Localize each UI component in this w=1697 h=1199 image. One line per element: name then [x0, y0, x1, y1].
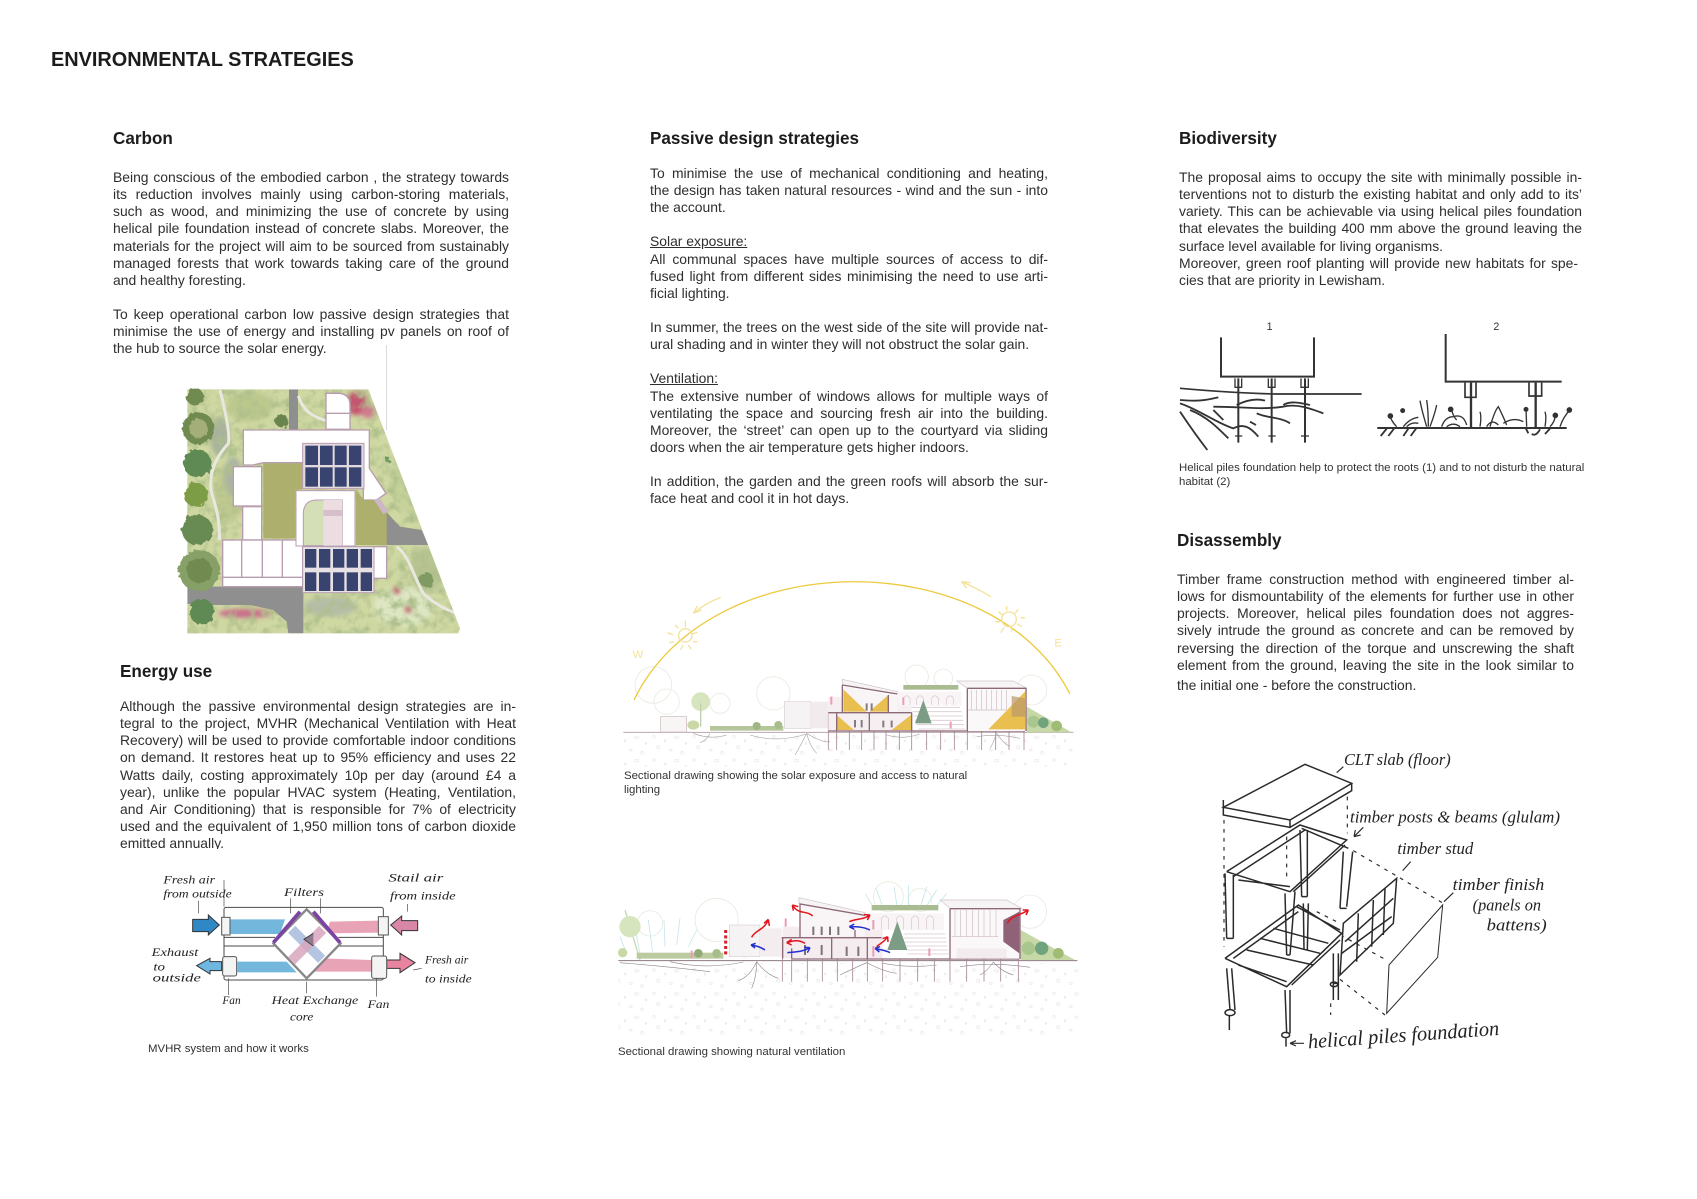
text block: disassembly body: projects. Moreover, helical piles foundation does not aggres- [1177, 605, 1574, 621]
text block: carbon body: such as wood, and minimizing the use of concrete by using [113, 203, 509, 219]
sectional drawing: solar exposure [623, 581, 1074, 766]
text block: energy use body: used and the equivalent of 1,950 million tons of carbon dioxide [120, 818, 516, 834]
hand labels: timber stud [1397, 839, 1474, 858]
text block: disassembly body: the initial one - before the construction. [1177, 677, 1416, 693]
pink ducts [313, 921, 378, 972]
compass letters: W [633, 649, 644, 661]
text block: biodiversity body: Moreover, green roof planting will provide new habitats for spe- [1179, 255, 1578, 271]
panel: biodiversity [1179, 129, 1582, 288]
sun east [962, 582, 1025, 633]
text block: energy use body [120, 698, 516, 849]
figures [831, 697, 951, 728]
text block: passive design body [650, 165, 1048, 506]
building roof [223, 393, 387, 587]
right volume [940, 900, 1022, 908]
posts and beams [1225, 825, 1353, 955]
CLT slab [1223, 764, 1352, 827]
leader lines [198, 880, 422, 997]
text block: disassembly body: element from the ground, leaving the site in the look similar to [1177, 657, 1574, 673]
red fence [721, 930, 730, 957]
text block: energy use body: Watts daily, costing approximately 10p per day (around £4 a [120, 766, 516, 782]
casing [224, 907, 383, 980]
caption: solar section: lighting [624, 784, 660, 796]
text block: biodiversity body [1179, 169, 1582, 288]
helical piles sketches [1179, 321, 1572, 450]
solar panels lower [303, 547, 374, 593]
arches and green roof [867, 913, 944, 930]
text block: carbon body: managed forests that work towards taking care of the ground [113, 255, 509, 271]
furniture [805, 927, 858, 956]
hand labels: Stail air [388, 871, 444, 885]
text block: passive design body: All communal spaces have multiple sources of access to dif- [650, 251, 1048, 267]
piles [782, 938, 1018, 982]
text block: carbon body: the hub to source the solar energy. [113, 340, 327, 356]
text block: biodiversity body: terventions not to disturb the existing habitat and only add to its’ [1179, 186, 1582, 202]
heading: carbon: Carbon [113, 129, 173, 148]
text block: carbon body: materials for the project will aim to be sourced from sustainably [113, 238, 509, 254]
courtyard [296, 491, 355, 546]
text block: passive design body: Ventilation: [650, 370, 718, 386]
text block: disassembly body: lows for dismountability of the elements for further use in other [1177, 588, 1574, 604]
text block: carbon body [113, 169, 509, 356]
site plan with solar panels [177, 345, 460, 634]
hand labels: from outside [163, 886, 232, 900]
panel: disassembly [1177, 531, 1574, 693]
stairs [903, 934, 949, 954]
text block: carbon body: its reduction involves mainly using carbon-storing materials, [113, 186, 509, 202]
text block: carbon body: Being conscious of the embodied carbon , the strategy towards [113, 169, 509, 185]
heat exchange core [273, 909, 341, 978]
dashed guide lines [1224, 797, 1443, 1015]
title: ENVIRONMENTAL STRATEGIES [51, 49, 354, 71]
arches and green roof [898, 692, 962, 706]
ground and planting [623, 692, 1073, 732]
figures [692, 918, 929, 958]
text block: disassembly body: reversing the direction of the torque and unscrewing the shaft [1177, 640, 1574, 656]
warm air arrows [752, 905, 1028, 947]
text block: energy use body: Although the passive environmental design strategies are in- [120, 698, 516, 714]
ground and planting [618, 910, 1077, 961]
hand labels: Exhaust [150, 945, 199, 959]
text block: carbon body: minimise the use of energy and installing pv panels on roof of [113, 323, 509, 339]
building [692, 898, 1022, 959]
stairs [912, 707, 965, 729]
heading: energy use: Energy use [120, 662, 212, 681]
caption: helical piles: habitat (2) [1179, 476, 1230, 488]
stud wall [1340, 878, 1397, 975]
wind lines [620, 885, 947, 958]
hand labels: Fan [367, 997, 389, 1011]
hand labels [150, 871, 472, 1024]
heading: biodiversity: Biodiversity [1179, 129, 1277, 148]
exploded timber frame sketch [1221, 750, 1560, 1053]
hand labels: timber posts & beams (glulam) [1350, 808, 1560, 827]
grey access roads [187, 389, 428, 633]
cool air arrows [751, 924, 890, 953]
text block: passive design body: fused light from different sides minimising the need to use arti- [650, 268, 1048, 284]
heading: disassembly: Disassembly [1177, 531, 1282, 550]
caption: MVHR: MVHR system and how it works [148, 1043, 309, 1055]
text block: passive design body: the design has taken natural resources - wind and the sun - into [650, 182, 1048, 198]
panel: energy use [120, 662, 516, 849]
text block: passive design body: ural shading and in winter they will not obstruct the solar gain. [650, 336, 1029, 352]
text block: disassembly body: sively intrude the ground as concrete and can be removed by [1177, 622, 1574, 638]
text block: carbon body: To keep operational carbon low passive design strategies that [113, 306, 509, 322]
text block: passive design body: face heat and cool it in hot days. [650, 490, 849, 506]
watercolour texture [187, 389, 461, 634]
panel: carbon [113, 129, 509, 356]
right volume [957, 681, 1027, 688]
hand labels: Fan [221, 993, 241, 1007]
sectional drawing: solar exposure: E [1054, 638, 1062, 650]
text block: biodiversity body: surface level available for living organisms. [1179, 238, 1443, 254]
text block: energy use body: tegral to the project, MVHR (Mechanical Ventilation with Heat [120, 715, 516, 731]
floor frame [1225, 903, 1342, 1047]
hand labels: CLT slab (floor) [1344, 750, 1451, 769]
background trees [635, 665, 1047, 714]
people [855, 703, 892, 727]
building [828, 679, 1027, 731]
text block: disassembly body: Timber frame construction method with engineered timber al- [1177, 571, 1574, 587]
sketch 2: habitat [1377, 321, 1571, 436]
hand labels: timber finish [1453, 875, 1544, 894]
caption: helical piles [1179, 462, 1584, 488]
text block: energy use body: year), unlike the popular HVAC system (Heating, Ventilation, [120, 784, 516, 800]
text block: energy use body: on demand. It restores heat up to 95% efficiency and uses 22 [120, 749, 516, 765]
sketch 2: habitat: 2 [1493, 321, 1499, 333]
hand labels: battens) [1487, 916, 1547, 935]
arrows: air flows [193, 915, 418, 974]
solar panels upper [303, 443, 364, 489]
sketch 1: roots [1180, 321, 1362, 450]
caption: ventilation section: Sectional drawing showing natural ventilation [618, 1046, 845, 1058]
text block: passive design body: ficial lighting. [650, 285, 730, 301]
hand labels: Fresh air [162, 872, 215, 886]
text block: passive design body: ventilating the space and sourcing fresh air into the building. [650, 405, 1048, 421]
text block: passive design body: To minimise the use of mechanical conditioning and heating, [650, 165, 1048, 181]
leader arrows [1290, 767, 1453, 1046]
roots [693, 733, 1020, 755]
hand labels [1307, 750, 1560, 1053]
soil texture [618, 963, 1078, 1038]
MVHR diagram [150, 871, 472, 1024]
heading: passive design: Passive design strategies [650, 129, 859, 148]
text block: energy use body: and Air Conditioning) that is responsible for 7% of electricity [120, 801, 516, 817]
panel: passive design strategies [650, 129, 1048, 506]
text block: passive design body: Moreover, the ‘street’ can open up to the courtyard via sliding [650, 422, 1048, 438]
caption: helical piles: Helical piles foundation help to protect the roots (1) and to not disturb the natural [1179, 462, 1584, 474]
text block: passive design body: In addition, the garden and the green roofs will absorb the sur- [650, 473, 1048, 489]
hand labels: to [153, 960, 165, 974]
text block: biodiversity body: variety. This can be achievable via using helical piles foundation [1179, 203, 1582, 219]
hand labels: helical piles foundation [1307, 1018, 1500, 1053]
hand labels: Heat Exchange [270, 993, 359, 1007]
text block: biodiversity body: The proposal aims to occupy the site with minimally possible in- [1179, 169, 1582, 185]
text block: passive design body: doors when the air temperature gets higher indoors. [650, 439, 969, 455]
fans [222, 917, 388, 978]
piles [828, 713, 1024, 750]
roots [620, 962, 1030, 988]
text block: energy use body: Recovery) will be used to provide comfortable indoor conditions [120, 732, 516, 748]
text block: passive design body: The extensive number of windows allows for multiple ways of [650, 388, 1048, 404]
text block: disassembly body [1177, 571, 1574, 693]
sketch 1: roots: 1 [1267, 321, 1273, 333]
hand labels: core [290, 1010, 314, 1024]
sun path arc [634, 582, 1070, 700]
hand labels: to inside [425, 971, 472, 985]
soil texture [623, 734, 1073, 767]
timber finish panel [1387, 905, 1443, 1013]
inner gardens [263, 463, 302, 538]
background trees [637, 882, 1047, 942]
text block: carbon body: and healthy foresting. [113, 272, 246, 288]
caption: solar section: Sectional drawing showing the solar exposure and access to natural [624, 770, 967, 782]
paths [211, 390, 457, 613]
hand labels: Filters [283, 885, 324, 899]
text block: passive design body: the account. [650, 199, 726, 215]
trees [179, 388, 434, 624]
text block: biodiversity body: cies that are priority in Lewisham. [1179, 272, 1385, 288]
text block: biodiversity body: that elevates the building 400 mm above the ground leaving the [1179, 220, 1582, 236]
hand labels: (panels on [1473, 896, 1541, 915]
text block: passive design body: In summer, the trees on the west side of the site will provide nat- [650, 319, 1048, 335]
hand labels: Fresh air [424, 952, 469, 966]
hand labels: from inside [390, 888, 456, 902]
blue ducts [230, 919, 297, 972]
text block: carbon body: helical pile foundation instead of concrete slabs. Moreover, the [113, 220, 509, 236]
sectional drawing: natural ventilation [618, 881, 1078, 1034]
text block: passive design body: Solar exposure: [650, 233, 747, 249]
hand labels: outside [153, 970, 202, 984]
sun west [667, 597, 721, 650]
caption: solar section [624, 770, 967, 796]
